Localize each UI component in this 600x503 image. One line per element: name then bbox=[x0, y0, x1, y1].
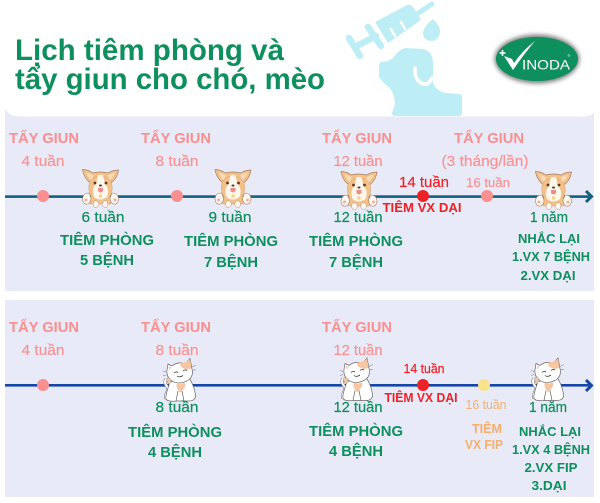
milestone: deworm 8 weeks: TẨY GIUN bbox=[141, 129, 211, 147]
milestone: deworm every 3 months: TẨY GIUN bbox=[454, 129, 524, 147]
milestone: deworm 8 weeks: 8 tuần bbox=[156, 342, 198, 359]
milestone: deworm 4 weeks bbox=[9, 318, 79, 391]
logo: Vinoda: ® bbox=[568, 53, 571, 58]
milestone: deworm every 3 months: 16 tuần bbox=[466, 175, 510, 190]
panel: dog schedule bbox=[5, 108, 594, 291]
vaccine: 8 weeks bbox=[128, 399, 222, 461]
title: tẩy giun cho chó, mèo bbox=[15, 63, 325, 96]
vaccine: 12 weeks: 4 BỆNH bbox=[329, 442, 383, 460]
panel background bbox=[5, 300, 594, 497]
timeline: dog bbox=[5, 191, 592, 202]
vaccine: 8 weeks: 8 tuần bbox=[156, 399, 198, 416]
milestone: deworm every 3 months bbox=[442, 129, 528, 202]
FIP vaccine: 16 weeks: VX FIP bbox=[465, 437, 503, 452]
rabies vaccine: 14 weeks bbox=[382, 175, 462, 215]
panel: cat schedule bbox=[5, 300, 594, 497]
vaccine: 12 weeks: TIÊM PHÒNG bbox=[309, 232, 403, 250]
milestone: deworm 4 weeks bbox=[9, 129, 79, 202]
milestone: deworm 12 weeks: 12 tuần bbox=[334, 153, 382, 170]
booster: 1 year: 2.VX DẠI bbox=[520, 268, 576, 283]
booster: 1 year: 1.VX 7 BỆNH bbox=[512, 249, 590, 264]
booster: 1 year: NHẮC LẠI bbox=[518, 231, 580, 246]
milestone: deworm 12 weeks: TẨY GIUN bbox=[322, 318, 392, 336]
icon: dog 6 weeks bbox=[82, 170, 118, 208]
milestone: deworm 12 weeks bbox=[322, 129, 392, 170]
FIP vaccine: 16 weeks: 16 tuần bbox=[466, 397, 506, 412]
vaccine: 9 weeks: 9 tuần bbox=[208, 209, 252, 226]
logo: Vinoda bbox=[494, 34, 580, 84]
milestone: deworm every 3 months: (3 tháng/lần) bbox=[442, 153, 528, 170]
icon: syringe and dog bbox=[349, 4, 462, 116]
booster: 1 year: 1 năm bbox=[529, 399, 567, 416]
FIP vaccine: 16 weeks: TIÊM bbox=[472, 421, 502, 436]
booster: 1 year: 1 năm bbox=[530, 209, 568, 226]
rabies vaccine: 14 weeks: TIÊM VX DẠI bbox=[382, 200, 462, 215]
booster: 1 year: NHẮC LẠI bbox=[519, 424, 581, 439]
milestone: deworm 8 weeks: TẨY GIUN bbox=[141, 318, 211, 336]
vaccine: 8 weeks: TIÊM PHÒNG bbox=[128, 423, 222, 441]
milestone: deworm 12 weeks: TẨY GIUN bbox=[322, 129, 392, 147]
vaccine: 9 weeks: 7 BỆNH bbox=[204, 253, 258, 271]
rabies vaccine: 14 weeks: 14 tuần bbox=[399, 175, 449, 191]
vaccine: 12 weeks: 12 tuần bbox=[334, 209, 382, 226]
vaccine: 6 weeks: 6 tuần bbox=[82, 209, 124, 226]
booster: 1 year: 2.VX FIP bbox=[524, 460, 578, 475]
milestone: deworm 4 weeks: 4 tuần bbox=[22, 342, 64, 359]
vaccine: 12 weeks: 7 BỆNH bbox=[329, 253, 383, 271]
title: Lịch tiêm phòng và bbox=[15, 34, 284, 67]
vaccine: 9 weeks bbox=[184, 209, 278, 271]
milestone: deworm 8 weeks bbox=[141, 129, 211, 202]
milestone: deworm 4 weeks: 4 tuần bbox=[22, 153, 64, 170]
vaccine: 9 weeks: TIÊM PHÒNG bbox=[184, 232, 278, 250]
vaccine: 6 weeks: 5 BỆNH bbox=[80, 251, 134, 269]
milestone: deworm 12 weeks bbox=[322, 318, 392, 359]
vaccine: 12 weeks: 12 tuần bbox=[334, 399, 382, 416]
vaccine: 12 weeks: TIÊM PHÒNG bbox=[309, 422, 403, 440]
icon: cat 1 year bbox=[531, 358, 564, 401]
panel background bbox=[5, 108, 594, 291]
milestone: deworm 8 weeks: 8 tuần bbox=[156, 153, 198, 170]
vaccine: 12 weeks bbox=[309, 399, 403, 460]
vaccine: 6 weeks bbox=[60, 209, 154, 269]
icon: cat 8 weeks bbox=[163, 358, 196, 401]
milestone: deworm 4 weeks: TẨY GIUN bbox=[9, 318, 79, 336]
icon: dog 9 weeks bbox=[215, 170, 251, 208]
rabies vaccine: 14 weeks bbox=[384, 361, 458, 405]
booster: 1 year: 1.VX 4 BỆNH bbox=[512, 442, 590, 457]
vaccine: 12 weeks bbox=[309, 209, 403, 271]
rabies vaccine: 14 weeks: TIÊM VX DẠI bbox=[384, 390, 458, 405]
booster: 1 year: 3.DẠI bbox=[532, 478, 566, 493]
milestone: deworm 4 weeks: TẨY GIUN bbox=[9, 129, 79, 147]
booster: 1 year bbox=[512, 399, 590, 493]
booster: 1 year bbox=[512, 209, 590, 283]
title bbox=[15, 34, 325, 96]
milestone: deworm 8 weeks bbox=[141, 318, 211, 359]
timeline: cat bbox=[5, 380, 592, 391]
rabies vaccine: 14 weeks: 14 tuần bbox=[404, 361, 444, 376]
vaccine: 6 weeks: TIÊM PHÒNG bbox=[60, 231, 154, 249]
icon: cat 12 weeks bbox=[340, 358, 373, 401]
milestone: deworm 12 weeks: 12 tuần bbox=[334, 342, 382, 359]
icon: dog 1 year bbox=[536, 172, 572, 210]
icon: dog 12 weeks bbox=[341, 172, 377, 210]
FIP vaccine: 16 weeks bbox=[465, 379, 506, 452]
vaccine: 8 weeks: 4 BỆNH bbox=[148, 443, 202, 461]
logo: Vinoda: INODA bbox=[522, 58, 570, 72]
